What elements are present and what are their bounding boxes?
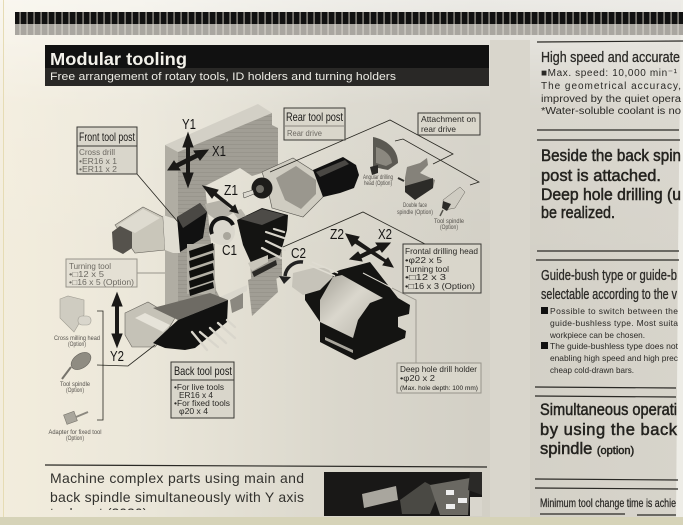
- callout: frontal drilling head: Turning tool: [405, 264, 449, 274]
- callout: frontal drilling head: •φ22 x 5: [405, 255, 442, 265]
- panel: high speed: [537, 41, 683, 130]
- option: adapter for fixed tool: [48, 411, 102, 442]
- callout: attachment on rear drive: rear drive: [421, 124, 456, 134]
- callout: back tool post: φ20 x 4: [179, 406, 208, 416]
- centre back spindle block: [233, 208, 288, 277]
- option: tool spindle rear: [434, 187, 465, 231]
- panel: guide-bush type: workpiece can be chosen.: [549, 330, 645, 340]
- callout: front tool post: •ER16 x 1: [79, 157, 118, 166]
- machine wall: [165, 104, 282, 316]
- callout: frontal drilling head: [403, 244, 481, 293]
- callout: turning tool: •□16 x 5 (Option): [69, 278, 134, 287]
- axis labels: X1: [212, 143, 226, 160]
- Z2 spindle unit: [292, 262, 410, 360]
- option: cross milling head: [54, 296, 100, 348]
- callout: deep hole drill holder: Deep hole drill holder: [400, 364, 477, 374]
- option: tool spindle left: [60, 349, 94, 394]
- option: adapter for fixed tool: (Option): [66, 436, 84, 442]
- axis labels: Y2: [110, 348, 124, 365]
- rear tool post: [243, 157, 359, 217]
- option: angular drilling head: Angular drilling: [363, 175, 393, 181]
- axis labels: [110, 116, 392, 365]
- bottom paper strip: [0, 517, 683, 525]
- callout: frontal drilling head: •□12 x 3: [405, 272, 446, 282]
- panel: beside the back spindle: be realized.: [541, 204, 615, 222]
- panel: simultaneous operation: spindle (option): [540, 440, 634, 458]
- title: Modular tooling: [50, 49, 187, 69]
- option: tool spindle left: (Option): [66, 388, 84, 394]
- leader lines: [97, 120, 479, 420]
- callout: rear tool post: Rear drive: [287, 129, 323, 138]
- arrow: Y2: [112, 293, 122, 347]
- panel: guide-bush type: cheap cold-drawn bars.: [550, 365, 634, 375]
- axis labels: C1: [222, 242, 237, 259]
- front turret tool stack: [187, 243, 215, 296]
- arrow: Z1: [203, 186, 238, 213]
- callout: deep hole drill holder: (Max. hole depth: 100 mm): [400, 385, 478, 392]
- text: machine complex parts: Machine complex parts using main and: [50, 470, 304, 486]
- callout: front tool post: Front tool post: [79, 130, 135, 144]
- option: angular drilling head: head (Option): [364, 181, 392, 187]
- callout: back tool post: ER16 x 4: [179, 390, 213, 400]
- text: machine complex parts: [40, 470, 320, 525]
- machine illustration: [112, 104, 410, 360]
- callout: back tool post: [171, 362, 234, 418]
- callout: frontal drilling head: Frontal drilling head: [405, 246, 478, 256]
- panel: guide-bush type: Possible to switch between the: [550, 306, 678, 316]
- text: machine complex parts: tool post (2020): [50, 505, 147, 521]
- option: tool spindle left: Tool spindle: [60, 382, 91, 388]
- option: tool spindle rear: Tool spindle: [434, 219, 465, 225]
- axis labels: C2: [291, 245, 306, 262]
- axis arrows: [112, 133, 393, 347]
- arrow: Z2: [346, 234, 393, 267]
- centre gutter band: [490, 40, 530, 517]
- panel: beside the back spindle: [537, 140, 681, 251]
- axis labels: Y1: [182, 116, 196, 133]
- panel: guide-bush type: [535, 260, 679, 388]
- option: double face spindle: Double face: [403, 203, 427, 209]
- header stripe: [15, 12, 683, 35]
- panel: guide-bush type: enabling high speed and high prec: [550, 353, 679, 363]
- C2 rotary arrow: [279, 262, 303, 284]
- photo: [324, 472, 482, 516]
- callout: back tool post: •For live tools: [174, 382, 224, 392]
- callout: attachment on rear drive: Attachment on: [421, 114, 476, 124]
- callout: rear tool post: [284, 108, 345, 140]
- subtitle: Free arrangement of rotary tools, ID holders and turning holders: [50, 71, 397, 83]
- callout: turning tool: [66, 259, 137, 287]
- panel: beside the back spindle: post is attached.: [541, 167, 661, 185]
- left paper edge: [3, 0, 4, 525]
- option: adapter for fixed tool: Adapter for fixed tool: [48, 430, 102, 436]
- panel: high speed: The geometrical accuracy,: [541, 81, 681, 92]
- arrow: Y1: [183, 133, 193, 187]
- callout: front tool post: [77, 127, 137, 174]
- option: double face spindle: spindle (Option): [397, 210, 433, 216]
- option: cross milling head: (Option): [68, 342, 86, 348]
- callout: front tool post: •ER11 x 2: [79, 165, 118, 174]
- callout: front tool post: Cross drill: [79, 148, 115, 157]
- axis labels: Z2: [330, 226, 344, 243]
- panel: simultaneous operation: [535, 396, 678, 480]
- arrow: X1: [168, 150, 208, 170]
- callout: turning tool: Turning tool: [69, 262, 111, 271]
- callout: turning tool: •□12 x 5: [69, 270, 105, 279]
- panel: high speed: *Water-soluble coolant is no: [541, 106, 681, 117]
- title banner: [45, 45, 489, 86]
- option: cross milling head: Cross milling head: [54, 336, 100, 342]
- panel: guide-bush type: The guide-bushless type does not: [550, 341, 679, 351]
- panel: high speed: improved by the quiet opera: [541, 94, 681, 105]
- right paper edge: [676, 0, 683, 525]
- bottom left rule: [45, 465, 487, 467]
- option: angular drilling head: [363, 137, 398, 187]
- callout: rear tool post: Rear tool post: [286, 110, 343, 124]
- callout: deep hole drill holder: •φ20 x 2: [400, 373, 435, 383]
- panel: high speed: ■Max. speed: 10,000 min⁻¹: [541, 68, 678, 79]
- axis labels: Z1: [224, 182, 238, 199]
- front tool post: [112, 200, 235, 254]
- text: machine complex parts: back spindle simultaneously with Y axis: [50, 489, 304, 505]
- option: tool spindle rear: (Option): [440, 225, 458, 231]
- panel: guide-bush type: guide-bushless type. Most suita: [550, 318, 678, 328]
- option: double face spindle: [397, 158, 435, 216]
- panel: simultaneous operation: by using the back: [540, 421, 678, 439]
- arrow: X2: [350, 243, 390, 261]
- callout: attachment on rear drive: [418, 113, 480, 135]
- back tool post: [125, 293, 235, 350]
- callout: back tool post: •For fixed tools: [174, 398, 230, 408]
- callout: back tool post: Back tool post: [174, 364, 233, 378]
- callout: deep hole drill holder: [397, 363, 481, 393]
- callout: frontal drilling head: •□16 x 3 (Option): [405, 281, 475, 291]
- axis labels: X2: [378, 226, 392, 243]
